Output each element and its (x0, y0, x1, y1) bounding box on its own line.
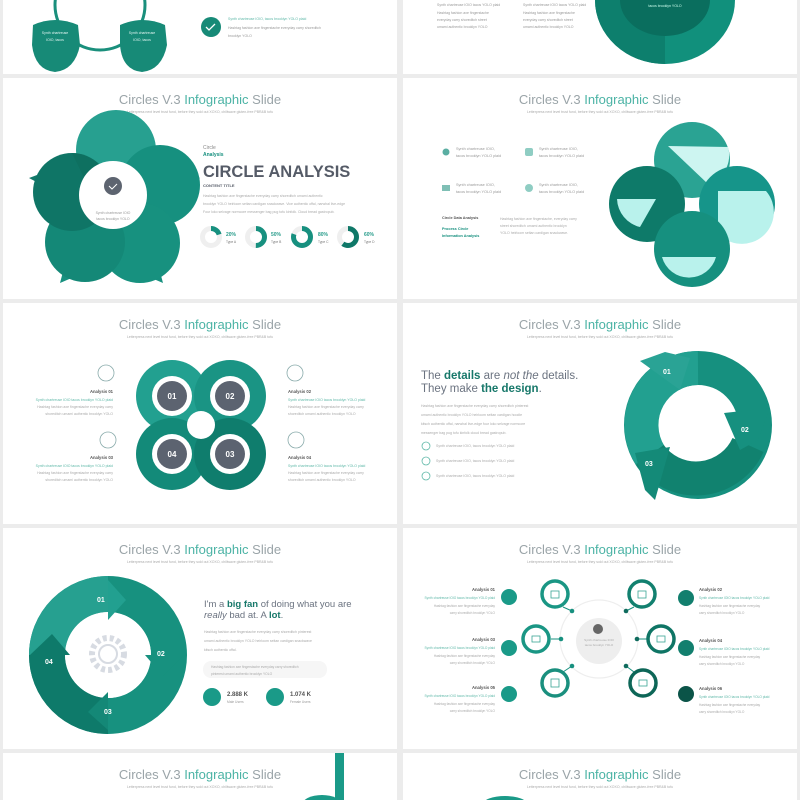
four-circle diagram: 01 (168, 392, 177, 401)
slide: process circle: Hashtag fashion axe fingerstache, everyday carry (500, 217, 577, 221)
slide: bottom-left partial: Circles V.3 Infographic Slide (119, 767, 281, 782)
side labels: carry shoreditch brooklyn YOLO (699, 662, 745, 666)
side labels: Synth chartreuse IOIO tacos brooklyn YOLO plaid (699, 695, 770, 699)
side labels: Synth chartreuse IOIO tacos brooklyn YOLO plaid (699, 596, 770, 600)
side labels: Analysis 05 (472, 685, 496, 690)
heading block: Analysis (203, 152, 224, 158)
slide: process circle (442, 92, 775, 287)
side labels: Synth chartreuse IOIO tacos brooklyn YOLO plaid (699, 647, 770, 651)
slide: top-right partial (437, 0, 735, 64)
side labels: Hashtag fashion axe fingerstache everyday (699, 655, 761, 659)
title: Circles V.3 Infographic Slide (119, 542, 281, 557)
paragraph (421, 404, 528, 435)
side labels: carry shoreditch brooklyn YOLO (450, 611, 496, 615)
check list (422, 442, 514, 480)
slide: top-left partial: Hashtag fashion axe fingerstache everyday carry shoreditch (228, 26, 321, 30)
donut charts (202, 228, 356, 246)
slide: bottom-right partial: Circles V.3 Infographic Slide (519, 767, 681, 782)
analysis items: Synth chartreuse IOIO tacos brooklyn YOLO plaid (288, 464, 365, 468)
side labels: carry shoreditch brooklyn YOLO (699, 611, 745, 615)
slide: top-right partial: umami authentic brooklyn YOLO (437, 25, 488, 29)
slide: top-right partial: tacos brooklyn YOLO (648, 4, 682, 8)
slide: big fan: umami authentic brooklyn YOLO heirloom seitan cardigan snackwave (204, 639, 312, 643)
feature list: Synth chartreuse IOIO, (456, 183, 495, 187)
slide: circle analysis: Type C (318, 240, 329, 244)
side labels: Analysis 06 (699, 686, 723, 691)
side labels: Hashtag fashion axe fingerstache everyday (699, 703, 761, 707)
slide: big fan: Letterpress next level trust fund, before they sold out XOXO, chillwave gluten-free PBR&B tofu (127, 560, 273, 564)
feature list: tacos brooklyn YOLO plaid (539, 190, 584, 194)
four-circle diagram: 02 (226, 392, 235, 401)
ring arrows (30, 580, 184, 730)
slide: process circle: Process Circle (442, 227, 468, 231)
heading block: CIRCLE ANALYSIS (203, 163, 350, 181)
slide: circle analysis: 80% (318, 232, 329, 238)
heading block: Hashtag fashion axe fingerstache everyday carry shoreditch umami authentic (203, 194, 323, 198)
circular arrow (635, 352, 770, 500)
grey callout: pinterest umami authentic brooklyn YOLO (211, 672, 273, 676)
feature list (442, 147, 584, 194)
slide: circle analysis (29, 92, 375, 283)
slide: top-left partial: IOIO, tacos (133, 38, 151, 42)
side labels: Analysis 04 (699, 638, 723, 643)
slide: big fan: Hashtag fashion axe fingerstache everyday carry shoreditch pinterest (204, 630, 311, 634)
title: Circles V.3 Infographic Slide (519, 92, 681, 107)
analysis items: Analysis 04 (288, 455, 312, 460)
check list: Synth chartreuse IOIO, tacos brooklyn YOLO plaid (436, 459, 514, 463)
paragraph: messenger bag pug tofu kinfolk cloud bread gastropub. (421, 431, 506, 435)
hub: Synth chartreuse IOIO (584, 638, 615, 642)
analysis items: Analysis 02 (288, 389, 312, 394)
four-circle diagram: 03 (226, 450, 235, 459)
slide: circle analysis: Type A (226, 240, 237, 244)
slide: big fan (30, 542, 352, 730)
heading block: brooklyn YOLO heirloom seitan cardigan snackwave. Vice authentic offal, narwhal live-edge (203, 202, 345, 206)
slide: top-right partial: Synth chartreuse IOIO tacos YOLO plaid (523, 3, 586, 7)
slide: circle analysis: 20% (226, 232, 237, 238)
side labels: carry shoreditch brooklyn YOLO (699, 710, 745, 714)
analysis items: Hashtag fashion axe fingerstache everyday carry (37, 471, 113, 475)
side labels (425, 587, 770, 714)
slide: process circle: Letterpress next level trust fund, before they sold out XOXO, chillwave gluten-free PBR&B tofu (527, 110, 673, 114)
four-leaf circles (609, 122, 775, 287)
feature list: Synth chartreuse IOIO, (539, 183, 578, 187)
four-circle diagram: 04 (168, 450, 177, 459)
slide: process circle: Information Analysis (442, 234, 479, 238)
analysis items (36, 365, 365, 482)
slide: top-left partial (32, 0, 321, 72)
check list: Synth chartreuse IOIO, tacos brooklyn YOLO plaid (436, 474, 514, 478)
side labels: Analysis 03 (472, 637, 496, 642)
side labels: Synth chartreuse IOIO tacos brooklyn YOLO plaid (425, 694, 495, 698)
slide: circle analysis: 50% (271, 232, 282, 238)
side labels: Synth chartreuse IOIO tacos brooklyn YOLO plaid (425, 596, 495, 600)
slide: top-right partial: Hashtag fashion axe fingerstache (523, 11, 575, 15)
slide: bottom-left partial (119, 753, 344, 800)
paragraph: Hashtag fashion axe fingerstache everyday carry shoreditch pinterest (421, 404, 528, 408)
side labels: Hashtag fashion axe fingerstache everyday (699, 604, 761, 608)
slide: process circle: street shoreditch umami authentic brooklyn (500, 224, 567, 228)
slide: top-right partial: everyday carry shoreditch street (523, 18, 573, 22)
heading block (203, 145, 350, 214)
analysis items: Hashtag fashion axe fingerstache everyday carry (37, 405, 113, 409)
analysis items: Synth chartreuse IOIO tacos brooklyn YOLO plaid (36, 398, 113, 402)
heading block: CONTENT TITLE (203, 183, 235, 188)
analysis items: Analysis 03 (90, 455, 114, 460)
analysis items: shoreditch umami authentic brooklyn YOLO (45, 478, 113, 482)
slide: bottom-left partial: Letterpress next level trust fund, before they sold out XOXO, chillwave gluten-free PBR&B tofu (127, 785, 273, 789)
title: Circles V.3 Infographic Slide (119, 317, 281, 332)
slide: bottom-right partial: Letterpress next level trust fund, before they sold out XOXO, chillwave gluten-free PBR&B tofu (527, 785, 673, 789)
heading block: Four loko selvage normcore messenger bag pug tofu kinfolk. Cloud bread gastropub. (203, 210, 335, 214)
analysis items: shoreditch umami authentic brooklyn YOLO (45, 412, 113, 416)
feature list: Synth chartreuse IOIO, (456, 147, 495, 151)
slide: details / circular arrow: They make the design. (421, 383, 542, 395)
side labels: Hashtag fashion axe fingerstache everyday (434, 702, 495, 706)
slide: 4 steps: Letterpress next level trust fund, before they sold out XOXO, chillwave gluten-free PBR&B tofu (127, 335, 273, 339)
slide: process circle: Circle Data Analysis (442, 216, 478, 220)
flower chart (29, 110, 200, 283)
side labels: Hashtag fashion axe fingerstache everyday (434, 604, 495, 608)
side labels: Synth chartreuse IOIO tacos brooklyn YOLO plaid (425, 646, 495, 650)
analysis items: shoreditch umami authentic brooklyn YOLO (288, 478, 356, 482)
slide: 4 steps (36, 317, 365, 490)
ring arrows: 03 (104, 709, 112, 716)
side labels: Analysis 02 (699, 587, 723, 592)
check list: Synth chartreuse IOIO, tacos brooklyn YOLO plaid (436, 444, 514, 448)
slide: top-left partial: Synth chartreuse (42, 31, 68, 35)
stats (203, 688, 312, 706)
stats: 1.074 K (290, 692, 312, 698)
slide: top-left partial: brooklyn YOLO (228, 34, 252, 38)
paragraph: kitsch authentic offal, narwhal live-edge four loko selvage normcore (421, 422, 525, 426)
feature list: Synth chartreuse IOIO, (539, 147, 578, 151)
four-circle diagram (136, 360, 266, 490)
slide: details / circular arrow (421, 317, 770, 500)
title: Circles V.3 Infographic Slide (119, 92, 281, 107)
analysis items: shoreditch umami authentic brooklyn YOLO (288, 412, 356, 416)
slide: top-right partial: umami authentic brooklyn YOLO (523, 25, 574, 29)
circular arrow: 01 (663, 369, 671, 376)
slide: top-right partial: Synth chartreuse IOIO tacos YOLO plaid (437, 3, 500, 7)
slide: six analysis hub (425, 542, 770, 714)
slide: top-right partial: Hashtag fashion axe fingerstache (437, 11, 489, 15)
slide: top-left partial: Synth chartreuse IOIO, tacos brooklyn YOLO plaid (228, 17, 306, 21)
slide: circle analysis: Letterpress next level trust fund, before they sold out XOXO, chillwave gluten-free PBR&B tofu (127, 110, 273, 114)
stats: Female Users (290, 700, 311, 704)
slide: six analysis hub: Letterpress next level trust fund, before they sold out XOXO, chillwave gluten-free PBR&B tofu (527, 560, 673, 564)
slide: top-left partial: Synth chartreuse (129, 31, 155, 35)
feature list: tacos brooklyn YOLO plaid (539, 154, 584, 158)
slide: top-right partial: everyday carry shoreditch street (437, 18, 487, 22)
slide: big fan: kitsch authentic offal. (204, 648, 237, 652)
grey callout: Hashtag fashion axe fingerstache everyday carry shoreditch (211, 665, 299, 669)
quote heading: I'm a big fan of doing what you are (204, 599, 352, 610)
ring arrows: 01 (97, 597, 105, 604)
title: Circles V.3 Infographic Slide (519, 317, 681, 332)
analysis items: Synth chartreuse IOIO tacos brooklyn YOLO plaid (288, 398, 365, 402)
stats: 2.888 K (227, 692, 249, 698)
flower chart: tacos brooklyn YOLO (96, 217, 130, 221)
analysis items: Analysis 01 (90, 389, 114, 394)
slide: process circle: YOLO heirloom seitan cardigan snackwave. (500, 231, 568, 235)
circular arrow: 02 (741, 427, 749, 434)
title: Circles V.3 Infographic Slide (519, 542, 681, 557)
slide: circle analysis: Type B (271, 240, 282, 244)
paragraph: umami authentic brooklyn YOLO heirloom seitan cardigan hoodie (421, 413, 522, 417)
slide: circle analysis: Type D (364, 240, 375, 244)
ring arrows: 04 (45, 659, 53, 666)
slide: bottom-right partial (483, 767, 681, 800)
side labels: Hashtag fashion axe fingerstache everyday (434, 654, 495, 658)
hub (523, 581, 674, 696)
feature list: tacos brooklyn YOLO plaid (456, 154, 501, 158)
grey callout (203, 661, 327, 678)
slide: big fan: really bad at. A lot. (204, 610, 283, 621)
analysis items: Hashtag fashion axe fingerstache everyday carry (288, 405, 364, 409)
slide: details / circular arrow: Letterpress next level trust fund, before they sold out XOXO, chillwave gluten-free PBR&B tofu (527, 335, 673, 339)
side labels: carry shoreditch brooklyn YOLO (450, 709, 496, 713)
heading block: Circle (203, 145, 216, 151)
feature list: tacos brooklyn YOLO plaid (456, 190, 501, 194)
stats: Male Users (227, 700, 244, 704)
slide: circle analysis: 60% (364, 232, 375, 238)
circular arrow: 03 (645, 461, 653, 468)
slide: top-left partial: IOIO, tacos (46, 38, 64, 42)
analysis items: Hashtag fashion axe fingerstache everyday carry (288, 471, 364, 475)
hub: tacos brooklyn YOLO (585, 643, 614, 647)
side labels: carry shoreditch brooklyn YOLO (450, 661, 496, 665)
analysis items: Synth chartreuse IOIO tacos brooklyn YOLO plaid (36, 464, 113, 468)
flower chart: Synth chartreuse IOIO (96, 211, 131, 215)
ring arrows: 02 (157, 651, 165, 658)
quote heading: The details are not the details. (421, 370, 578, 382)
side labels: Analysis 01 (472, 587, 496, 592)
